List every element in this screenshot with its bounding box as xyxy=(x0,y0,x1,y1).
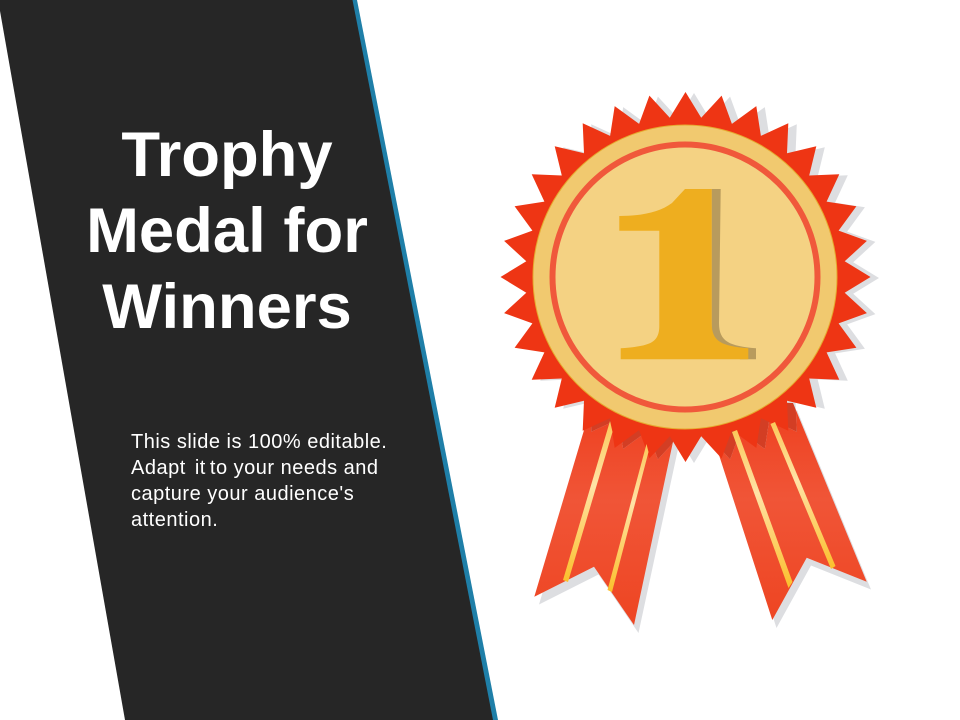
body text: Adapt it to your needs and xyxy=(131,457,379,479)
title: Medal for xyxy=(86,196,368,266)
inner disc xyxy=(553,145,817,409)
red ring xyxy=(552,144,818,410)
numeral 1 xyxy=(619,189,748,359)
body text xyxy=(131,430,387,531)
left ribbon tail xyxy=(534,400,680,625)
red starburst xyxy=(500,92,870,462)
gold disc xyxy=(533,125,837,429)
body text: capture your audience's xyxy=(131,483,354,505)
ribbon shadows xyxy=(539,408,871,633)
title: Winners xyxy=(102,272,352,342)
title xyxy=(86,120,368,342)
title: Trophy xyxy=(121,120,333,190)
body text: This slide is 100% editable. xyxy=(131,430,387,452)
right ribbon tail xyxy=(705,400,867,620)
ribbon stripes xyxy=(563,421,836,592)
numeral 1 shadow xyxy=(712,189,756,359)
medal xyxy=(500,92,879,633)
body text: attention. xyxy=(131,509,218,531)
starburst shadow on ribbons xyxy=(591,402,797,460)
dark slanted panel xyxy=(0,0,494,720)
starburst shadow xyxy=(509,93,879,463)
blue panel edge xyxy=(352,0,498,720)
